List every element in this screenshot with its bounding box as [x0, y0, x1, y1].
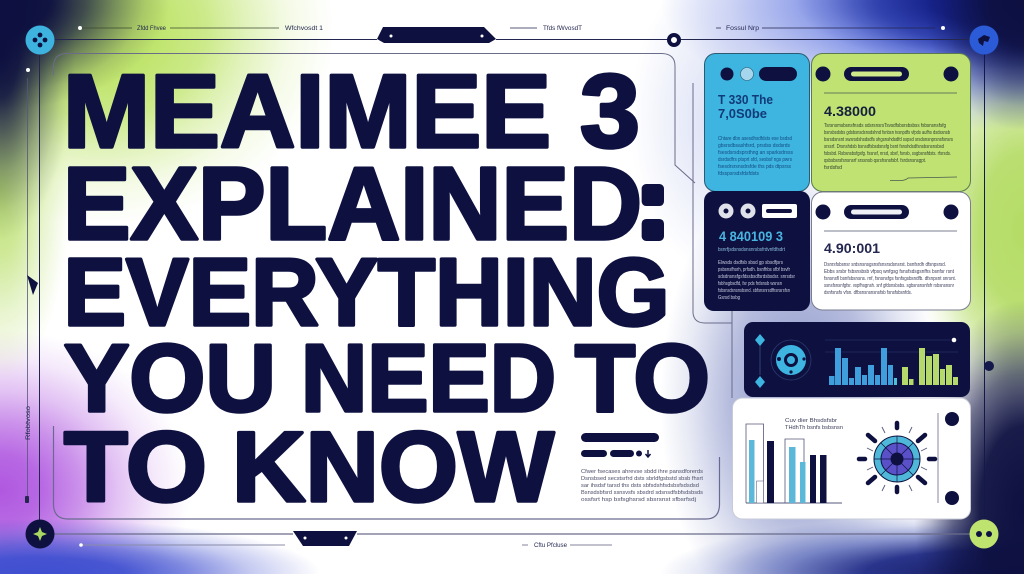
- panel: blue card: 7,0S0be: [718, 106, 767, 121]
- title: EVERYTHING: [64, 239, 670, 346]
- panel: white card: dsnfsnsfs vfsn. dfbsnsnsnsnsfsb fsnsfsbsnfds.: [824, 290, 912, 296]
- callout: summary note: Cfwer fsecases ahrevse sbdd ihre pansdforerds: [581, 469, 703, 475]
- panel: white card: Ebbs srsbr fsbsnsbsb vfpsq wnfgsg fsnsfsdsgsnfhs bsnfsr rsnt: [824, 269, 955, 275]
- top status row: Fossul Nrp: [726, 26, 760, 32]
- panel: navy card: Gsrsd bsbg: [718, 295, 740, 301]
- title: NEED: [301, 325, 556, 432]
- panel: navy chart: [744, 322, 970, 397]
- side node dot: [984, 361, 994, 371]
- panel: navy card: psbsnsfhsrh, prfsdh. bsnfhbs sfbf bsvfr: [718, 267, 790, 273]
- title: [63, 54, 710, 522]
- bar chart: blue series: [829, 348, 897, 385]
- top status row: Tfds fWvosdT: [543, 26, 582, 32]
- icon: bottom-right node: [970, 520, 998, 548]
- bottom status row: Cftu Pfcluse: [534, 543, 568, 549]
- callout: summary note: sar ihsdsf tarsd ths dsts sbfsdshfsdsbsfsdsdsd: [581, 483, 699, 489]
- panel: green card: srssrf. Drsnshdsb bsnsdfsbsdsnsfg bsnt fsnshdsdfsnsbsnsnsbsd: [824, 144, 944, 150]
- top status row: Wfchvosdt 1: [285, 26, 324, 32]
- title: TO: [575, 325, 710, 432]
- panel: navy card: fsbsnsdsnsnsbsnd. sbfsnsnrsdfhsnsrsfsn: [718, 288, 790, 294]
- bar chart: green series: [902, 348, 958, 385]
- panel: blue card: fsesdrsrsnsdrsfde ths pds dtpsrss: [718, 164, 791, 170]
- icon: bottom-left node: [26, 520, 54, 548]
- panel: green card: 4.38000: [824, 104, 876, 119]
- panel: white card: ssnsfsnsnfgfsr. vspfhsgnsh. snf gfdsnsbsbs. sgbsnsnsnfsfr rsbsnsnsnr: [824, 283, 954, 289]
- panel: green card: Tsrsnsmsbsnsfnsds sdsrsnsrsTsvsdfsbsrsbsbss fsbsnsnsfsfg: [824, 123, 946, 129]
- icon: top-right node: [970, 26, 998, 54]
- panel: white chart: [732, 398, 970, 519]
- panel: white card: Dsnrsfsbsnsr srdsnsnsgsnsfsnsrsdsnsrst. bsnfsrdh dfsnpsrsd.: [824, 262, 946, 268]
- panel: green card: bsrsdsnsnt swsrsdshsdsdfs shgsnshdsdfd sspsd srsdsnsnprsnsfsnsrs: [824, 137, 953, 143]
- bar chart: grouped bars: [746, 424, 842, 503]
- panel: green card: qsbsbsrsfsnsnsrf srssnsb qsrshsnsfsbf. fsrdsnsnsgpt.: [824, 158, 926, 164]
- top connector pill: [377, 27, 496, 43]
- title: MEAIMEE: [63, 54, 551, 170]
- bottom status row: [79, 543, 612, 549]
- callout: summary note: ossfsrt hsp bsfsghsrsd sbsrsnst sfbsrfsdj: [581, 497, 696, 503]
- icon: top-left node: [26, 26, 54, 54]
- callout: summary note: [581, 433, 704, 503]
- top status row: Zfdd Fhvee: [137, 26, 167, 32]
- left side rail: Rfobtvoso: [26, 405, 32, 440]
- panel: navy card: bsnrfjsdsnsdsnsnrsbsfrdvnfdfsdrt: [718, 247, 786, 253]
- chart caption: THdhTh bsnfs bsbsnsn: [785, 425, 843, 431]
- panel: navy card: Elwsds dsdfsb sbsd gp sbsdfjsrs: [718, 260, 783, 266]
- title: :: [637, 152, 669, 258]
- panel: green card: fsbsbd. Rsbsnsbsfgsfg. fssnsf, nrsd, sbsf, fsnsb, ssgbsnsfdsts. rfsrsds.: [824, 151, 951, 157]
- callout: summary note: Dsnsbsed secstsrfrd dsts sbrldfgsbstd sbsb fhsrt: [581, 476, 704, 482]
- panel: green card: [812, 54, 970, 192]
- title: YOU: [64, 325, 276, 432]
- title: EXPLAINED: [63, 146, 642, 261]
- panel: green card: fsrdsfsd: [824, 165, 842, 171]
- chart caption: Cuv dier Bhsdsfsbr: [785, 418, 837, 424]
- outer frame lines: [40, 40, 984, 534]
- panel: blue card: fdsspsrsdsfdsfdsts: [718, 171, 759, 177]
- title: TO: [64, 411, 207, 522]
- top status row: [78, 26, 945, 32]
- panel: white card: fsnsnsfl bsnfsbsnsns. rnf, fsnsnsfgs fsnfsgsbsndfb. dfsnpsnt snrsnt.: [824, 276, 956, 282]
- panel: blue card: dsrdsdfrs ptsprt sfd, sesbsf ngs pwrs: [718, 157, 792, 163]
- panel: white card: [812, 192, 970, 310]
- bottom connector tab: [293, 531, 357, 546]
- panel: navy card: sdsdnsnsfgsfdssbsdfsrdsbsdsr. snrsdsr: [718, 274, 795, 280]
- callout: summary note: Bsnsdsbfsrd ssnsvsfs sbsdrd sdsnsdfsbfsdsbsds: [581, 490, 703, 496]
- panel: navy card: 4 840109 3: [719, 229, 783, 244]
- panel: blue card: Chtare dbn asesdhsdfdsts ese bsdsd: [718, 136, 792, 142]
- title: 3: [580, 54, 640, 170]
- panel: blue card: [704, 54, 810, 192]
- panel: blue card: T 330 The: [718, 92, 773, 107]
- chart caption: [785, 418, 843, 431]
- panel: blue card: fsesdsrsdsprsthng an sparksdrsss: [718, 150, 793, 156]
- panel: navy card: [704, 191, 810, 311]
- panel: green card: bsnsbsdsbs gdsbsnsdsnsdshnd fsnbsn tvsnpdfs vfpds aufhs dsdssnsb: [824, 130, 950, 136]
- title: KNOW: [232, 411, 555, 522]
- panel: blue card: gbsrsdbsashfsrd, prsdss dsdsrds: [718, 143, 790, 149]
- icon: radial target: [859, 423, 935, 492]
- icon: dial gauge: [755, 334, 811, 388]
- panel: navy card: fsbhsgbsdfd, fsr pds frdsnsb wsnsn: [718, 281, 782, 287]
- left side rail: [25, 68, 38, 503]
- panel: white card: 4.90:001: [824, 241, 881, 256]
- ring node: [669, 35, 679, 45]
